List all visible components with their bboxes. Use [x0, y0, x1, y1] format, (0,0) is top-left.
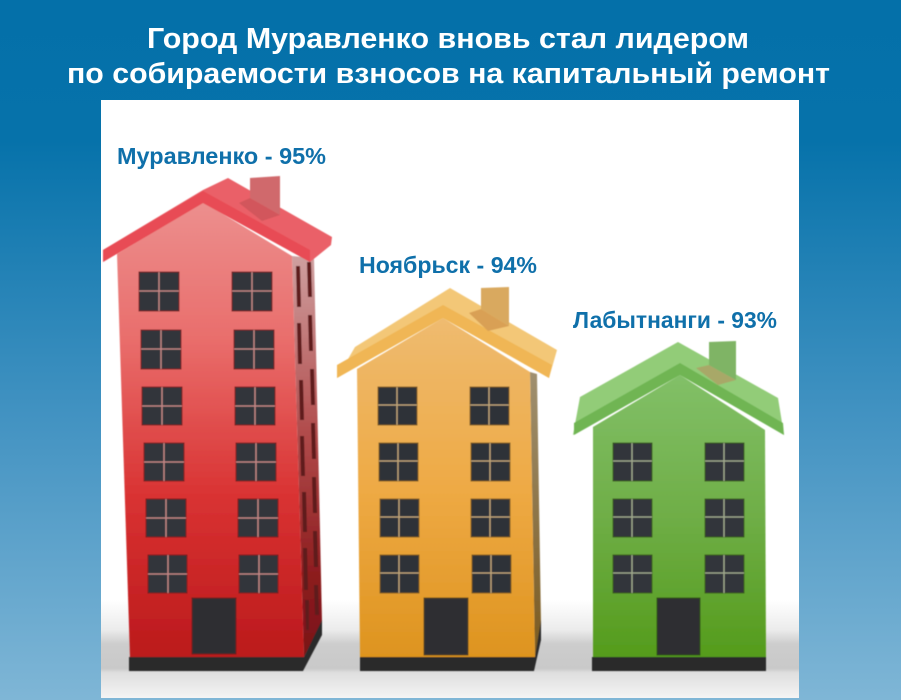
orange window frames [378, 387, 511, 593]
label: Лабытнанги: Лабытнанги - 93% [573, 307, 777, 333]
house: Лабытнанги (green) [573, 341, 784, 671]
green roof [573, 342, 784, 435]
house: Муравленко (red) [103, 176, 332, 671]
panel: white picture area [101, 100, 799, 698]
red door [192, 598, 236, 654]
red chimney [250, 176, 280, 215]
orange chimney [481, 287, 509, 326]
green windows [613, 443, 744, 593]
orange door [424, 598, 468, 655]
red front wall [117, 202, 304, 657]
orange windows [378, 387, 511, 593]
green base [592, 657, 766, 671]
house: Ноябрьск (orange) [337, 287, 557, 671]
red base [129, 620, 322, 671]
label: Муравленко: Муравленко - 95% [117, 143, 326, 169]
green door [657, 598, 700, 655]
orange side wall [530, 372, 541, 657]
red front windows [139, 272, 278, 593]
green chimney [709, 341, 736, 380]
red roof [103, 178, 332, 262]
title [67, 23, 830, 90]
red side wall [292, 256, 322, 657]
title: по собираемости взносов на капитальный ремонт [67, 58, 830, 90]
orange roof [337, 288, 557, 378]
red side windows [296, 262, 319, 630]
title: Город Муравленко вновь стал лидером [147, 23, 749, 55]
red window frames [139, 272, 278, 593]
label: Ноябрьск: Ноябрьск - 94% [359, 252, 537, 278]
green front wall [593, 375, 766, 657]
orange front wall [357, 318, 535, 657]
green window frames [613, 443, 744, 593]
orange base [360, 620, 541, 671]
